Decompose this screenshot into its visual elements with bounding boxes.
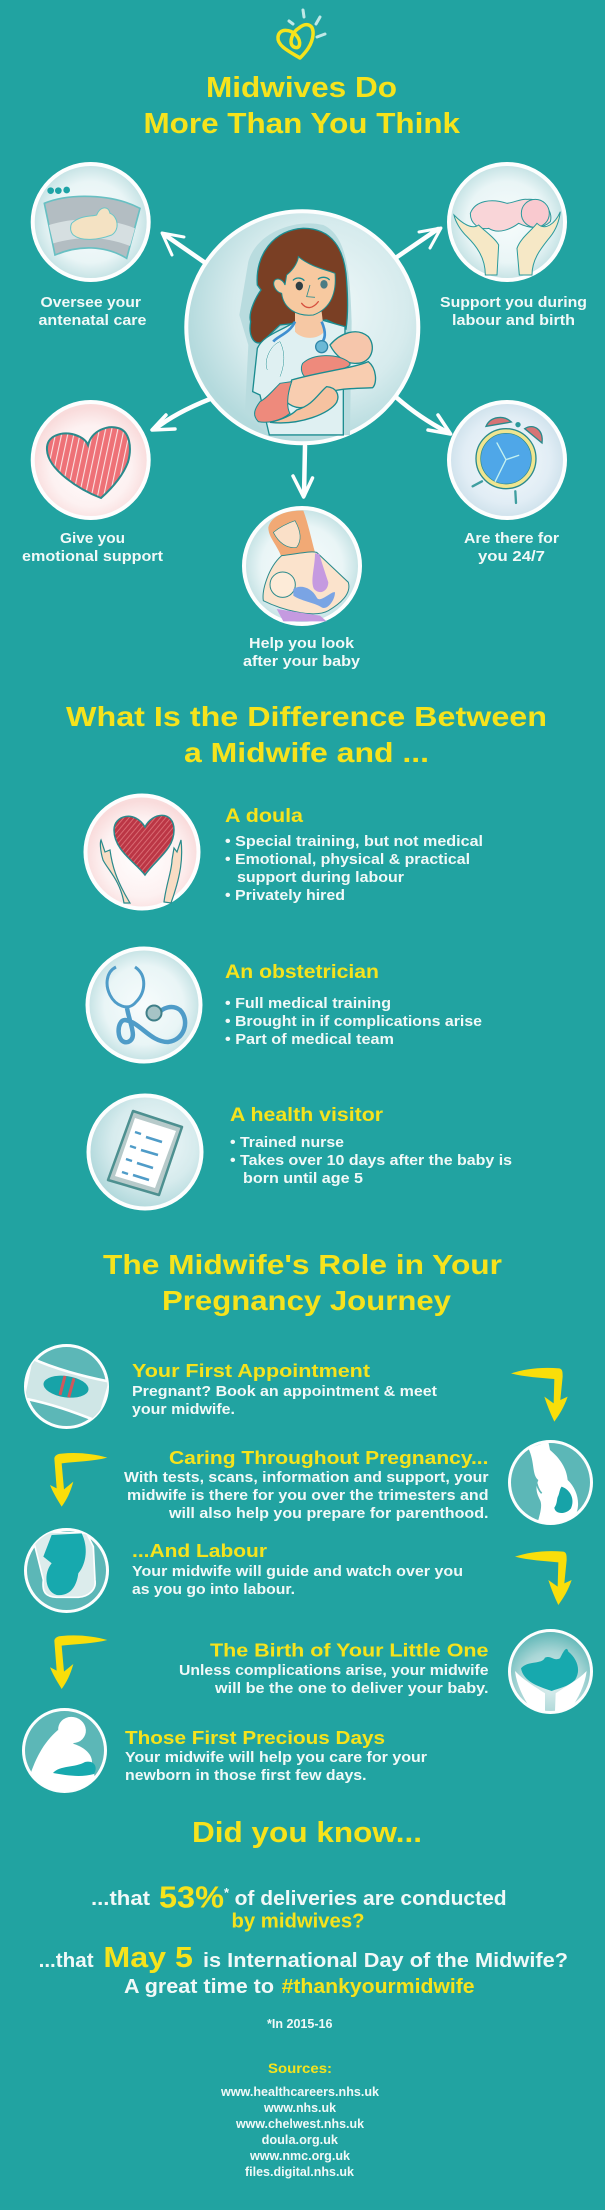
facial features [293,277,329,308]
step: caring throughout pregnancy [124,1442,592,1527]
heading: pregnancy journey: Pregnancy Journey [162,1285,452,1316]
sources: www.chelwest.nhs.uk [235,2117,364,2131]
fact: 53 percent of deliveries: 53% [159,1880,224,1914]
arrow: fourth to fifth step [50,1635,107,1689]
neck [295,312,324,338]
text: • Part of medical team [225,1032,394,1048]
icon: clipboard [88,1096,202,1208]
label: you 24/7 [478,549,545,565]
sources: www.healthcareers.nhs.uk [220,2085,379,2099]
label: Give you [60,531,125,547]
text: will be the one to deliver your baby. [214,1681,488,1697]
icon: ultrasound screen [33,164,149,280]
text: • Brought in if complications arise [225,1014,482,1030]
text: support during labour [237,870,404,886]
panel: a health visitor [88,1096,512,1208]
blanket top [301,356,350,378]
text [132,1541,463,1598]
sources: www.nmc.org.uk [249,2149,350,2163]
text: ...And Labour [132,1541,267,1561]
face [274,257,335,315]
text: Caring Throughout Pregnancy... [169,1448,488,1468]
panel: emotional support [22,402,163,565]
label: antenatal care [38,313,146,329]
panel: support during labour [440,164,587,329]
text: An obstetrician [225,962,379,983]
sources: files.digital.nhs.uk [245,2165,354,2179]
icon: breastfeeding mother [244,508,360,624]
arrow: second to third step [50,1453,107,1507]
step: first precious days [24,1710,427,1795]
text: Your midwife will help you care for your [125,1750,427,1766]
label: Support you during [440,295,587,311]
step: first appointment [23,1346,437,1428]
fact: 53 percent of deliveries [91,1880,507,1933]
midwife's arm holding baby [286,362,376,408]
fact: 53 percent of deliveries: ...that [91,1888,150,1910]
label: Are there for [464,531,559,547]
label: Oversee your [40,295,141,311]
fact: International Day of the Midwife: ...that [39,1950,94,1972]
midwife soft halo [239,223,352,437]
panel: oversee antenatal care [33,164,149,329]
heading: difference between: What Is the Difference Between [66,701,547,732]
text: newborn in those first few days. [125,1768,366,1784]
footnote: *In 2015-16 [267,2017,333,2031]
arrow: third to fourth step [515,1551,572,1605]
lower arm [270,387,338,423]
stethoscope [266,322,328,377]
label [464,531,559,565]
text: • Privately hired [225,888,345,904]
text: Unless complications arise, your midwife [179,1663,488,1679]
text: • Trained nurse [230,1135,344,1151]
panel: an obstetrician [88,948,482,1062]
text: A health visitor [230,1105,384,1126]
sources: Sources: [268,2060,332,2076]
text: With tests, scans, information and support, your [124,1470,489,1486]
fact: 53 percent of deliveries: by midwives? [232,1911,364,1933]
text: Those First Precious Days [125,1728,385,1748]
icon: pregnant silhouette [510,1442,592,1527]
label [22,531,163,565]
fact: International Day of the Midwife: May 5 [103,1942,193,1974]
text: • Full medical training [225,996,391,1012]
text: • Special training, but not medical [225,834,483,850]
icon: baby in womb [26,1530,108,1612]
baby's head [330,332,372,363]
label: after your baby [243,654,360,670]
panel: midwife portrait [186,211,418,443]
title: More Than You Think [144,108,461,140]
text: Pregnant? Book an appointment & meet [132,1384,437,1400]
text: Your midwife will guide and watch over you [132,1564,463,1580]
step: and labour [26,1530,463,1612]
icon: striped heart [33,402,149,518]
fact: 53 percent of deliveries: of deliveries are conducted [235,1888,507,1910]
text: midwife is there for you over the trimesters and [127,1488,489,1504]
text [179,1640,488,1697]
sources [220,2060,379,2179]
text: as you go into labour. [132,1582,295,1598]
heading: difference between [66,701,547,768]
arrows from the midwife to each role [152,228,451,497]
icon: hands holding newborn [510,1630,592,1712]
panel: a doula [86,796,483,908]
title [144,72,461,140]
scrubs [253,320,345,435]
hair [250,228,348,343]
text [230,1105,512,1187]
label [243,636,360,670]
blanket bottom [255,382,292,422]
title: Midwives Do [206,72,397,104]
fact: International Day of the Midwife: #thankyourmidwife [282,1976,475,1998]
heading: did you know: Did you know... [192,1817,422,1849]
text: will also help you prepare for parenthood. [168,1506,489,1522]
icon: stethoscope [88,948,200,1062]
text [225,806,483,904]
icon: mother cradling newborn [24,1710,106,1795]
text [125,1728,427,1784]
fact: 53 percent of deliveries: * [224,1885,230,1900]
sources: www.nhs.uk [263,2101,336,2115]
step: birth of your little one [179,1630,592,1712]
text: • Takes over 10 days after the baby is [230,1153,512,1169]
text [124,1448,489,1522]
icon: baby in hands [449,164,565,280]
panel: look after your baby [243,508,360,670]
arrow: first to second step [511,1368,568,1422]
icon: brand heart logo [278,10,325,58]
label: Help you look [249,636,355,652]
text: born until age 5 [243,1171,363,1187]
text: your midwife. [132,1402,235,1418]
text: Your First Appointment [132,1361,370,1381]
icon: pregnancy test [23,1346,110,1428]
heading: difference between: a Midwife and ... [184,737,429,768]
sources: doula.org.uk [262,2133,338,2147]
label [440,295,587,329]
fact: International Day of the Midwife: A great time to [124,1976,274,1998]
heading: pregnancy journey: The Midwife's Role in Your [103,1249,502,1280]
label [38,295,146,329]
icon: heart between hands [86,796,198,908]
text: • Emotional, physical & practical [225,852,470,868]
fact: International Day of the Midwife [39,1942,568,1998]
label: emotional support [22,549,163,565]
text: A doula [225,806,303,827]
text [132,1361,437,1418]
label: labour and birth [452,313,575,329]
text [225,962,482,1048]
fact: International Day of the Midwife: is International Day of the Midwife? [203,1950,568,1972]
heading: pregnancy journey [103,1249,502,1316]
icon: alarm clock [449,402,565,518]
panel: there 24/7 [449,402,565,565]
text: The Birth of Your Little One [210,1640,488,1660]
